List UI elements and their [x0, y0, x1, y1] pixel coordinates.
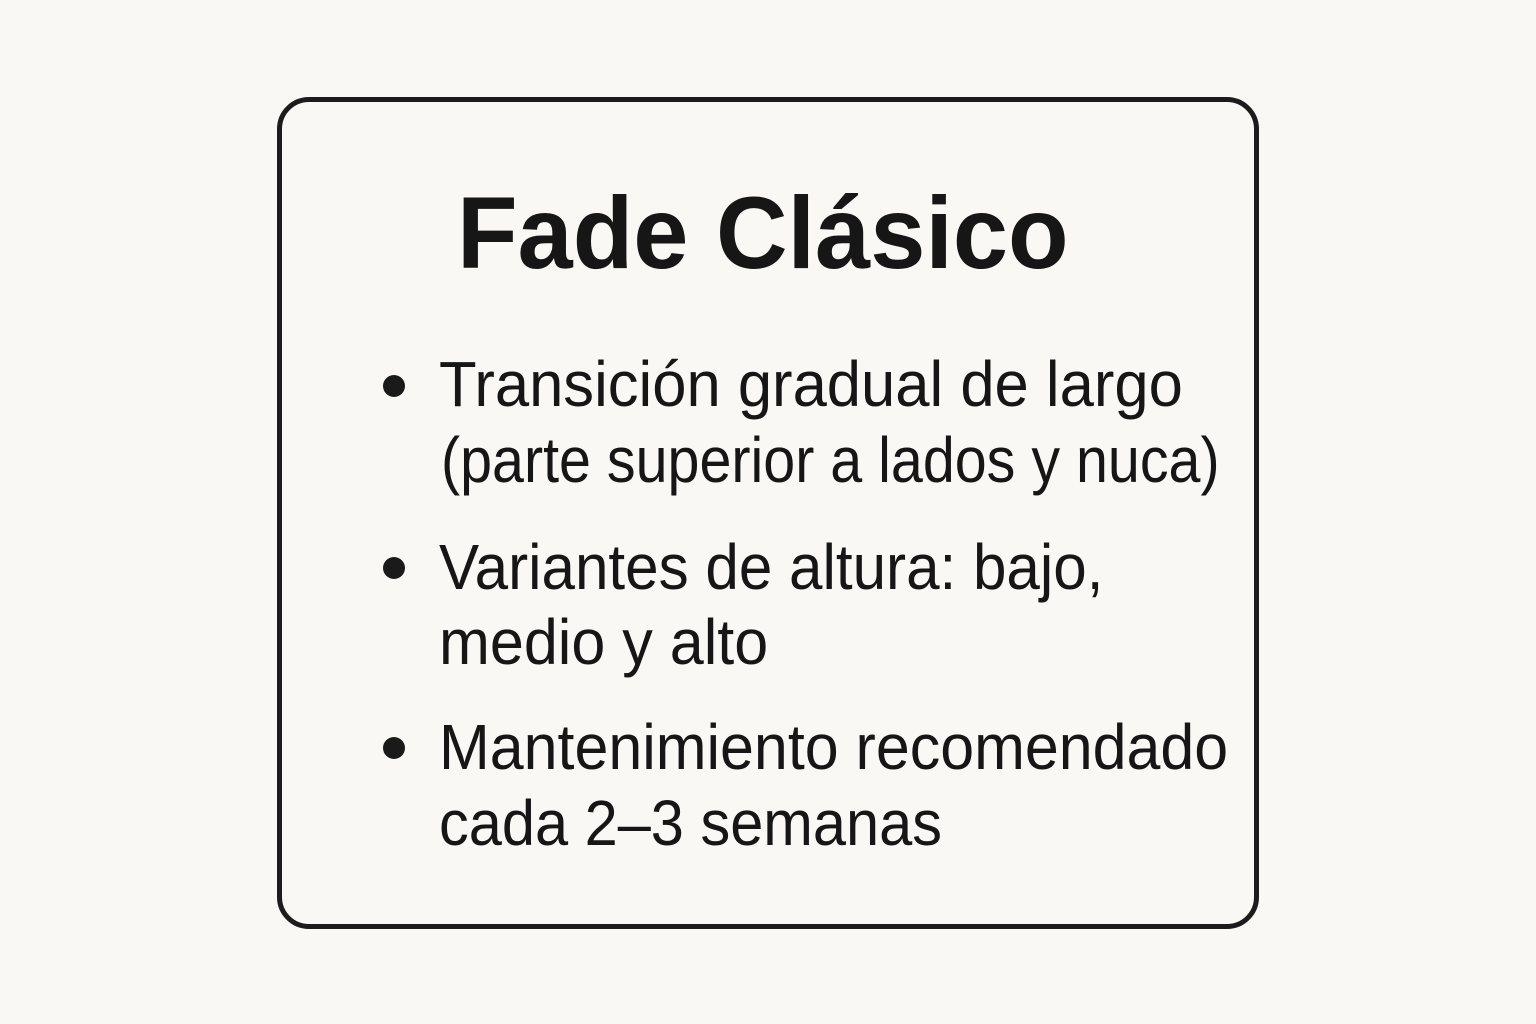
bullet 2 [383, 531, 1103, 678]
bullet 2: medio y alto [439, 606, 768, 678]
bullet 1: (parte superior a lados y nuca) [440, 424, 1219, 496]
bullet 3 [383, 711, 1228, 858]
bullet 1 [383, 348, 1219, 496]
bullet 2: Variantes de altura: bajo, [439, 531, 1103, 603]
title: Fade Clásico [457, 176, 1069, 290]
bullet 3: Mantenimiento recomendado [439, 711, 1228, 783]
panel: card frame [277, 97, 1259, 929]
bullet 3: cada 2–3 semanas [439, 786, 942, 858]
bullet 1: Transición gradual de largo [439, 348, 1183, 420]
